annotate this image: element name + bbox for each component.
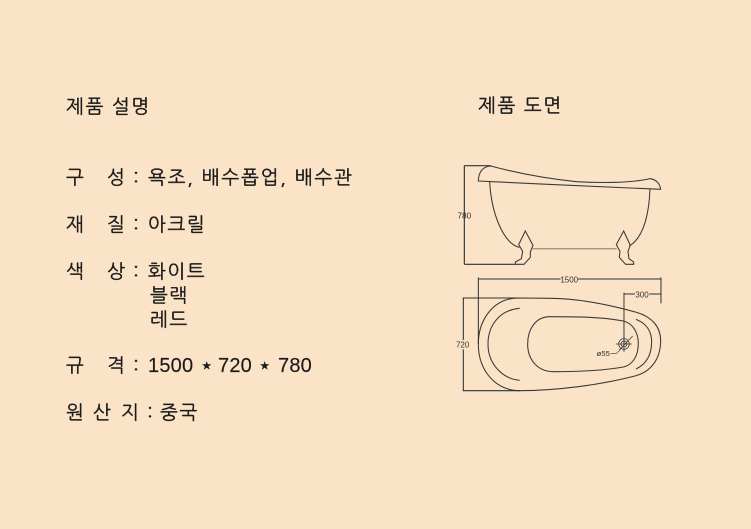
spec: material: 아크릴	[148, 215, 206, 234]
spec: material: 재	[66, 215, 84, 234]
spec: origin: 산	[93, 403, 111, 422]
drawing: side view of bathtub	[457, 166, 661, 264]
spec: material: :	[133, 215, 139, 234]
tub body	[490, 182, 519, 247]
drawing: top view of bathtub: 300	[635, 290, 649, 299]
right inner arcs	[636, 319, 652, 369]
spec: colour: 색	[66, 262, 84, 281]
spec: dimensions: 격	[107, 356, 125, 375]
spec: material: 질	[107, 215, 125, 234]
offset dimension	[624, 293, 661, 344]
drawing: top view of bathtub: 720	[456, 341, 470, 350]
width dimension	[478, 277, 661, 344]
spec: origin: 원	[66, 403, 84, 422]
spec: colour: :	[133, 262, 139, 281]
height dimension	[464, 166, 515, 264]
spec: dimensions: :	[133, 356, 139, 375]
spec: dimensions: ★	[202, 361, 211, 371]
spec: dimensions: 780	[278, 355, 312, 377]
spec: dimensions: 1500	[148, 355, 193, 377]
drawing: top view of bathtub: ø55	[597, 349, 610, 358]
base line	[533, 247, 617, 251]
spec: material	[66, 215, 206, 234]
heading: product description: 제품 설명	[66, 97, 151, 116]
spec: dimensions: 규	[66, 356, 84, 375]
spec: origin	[66, 403, 199, 422]
spec: dimensions	[66, 355, 312, 377]
spec: colour: 화이트	[148, 262, 206, 281]
rim	[478, 166, 661, 189]
spec: colour: 레드	[150, 310, 189, 329]
drawing: top view of bathtub	[456, 275, 661, 391]
basin	[528, 317, 638, 372]
spec: dimensions: 720	[218, 355, 252, 377]
spec: colour: 상	[107, 262, 125, 281]
drain	[616, 336, 633, 352]
spec: composition: 욕조, 배수폽업, 배수관	[148, 168, 354, 187]
drain label	[611, 349, 621, 353]
spec: origin: :	[147, 403, 153, 422]
outer shell	[478, 298, 661, 391]
spec: composition: :	[133, 168, 139, 187]
spec: dimensions: ★	[260, 361, 269, 371]
spec: origin: 중국	[160, 403, 199, 422]
spec: colour	[66, 262, 206, 329]
spec: colour: 블랙	[150, 286, 189, 305]
height label: 780	[457, 211, 472, 221]
drawing: top view of bathtub: 1500	[560, 275, 579, 284]
spec: composition: 구	[66, 168, 84, 187]
depth dimension	[463, 298, 520, 391]
heading: product drawing: 제품 도면	[478, 96, 563, 115]
left inner arc	[488, 308, 520, 380]
spec: origin: 지	[121, 403, 139, 422]
right foot	[616, 231, 634, 264]
spec: composition	[66, 168, 354, 188]
spec: composition: 성	[107, 168, 125, 187]
left foot	[515, 231, 533, 264]
